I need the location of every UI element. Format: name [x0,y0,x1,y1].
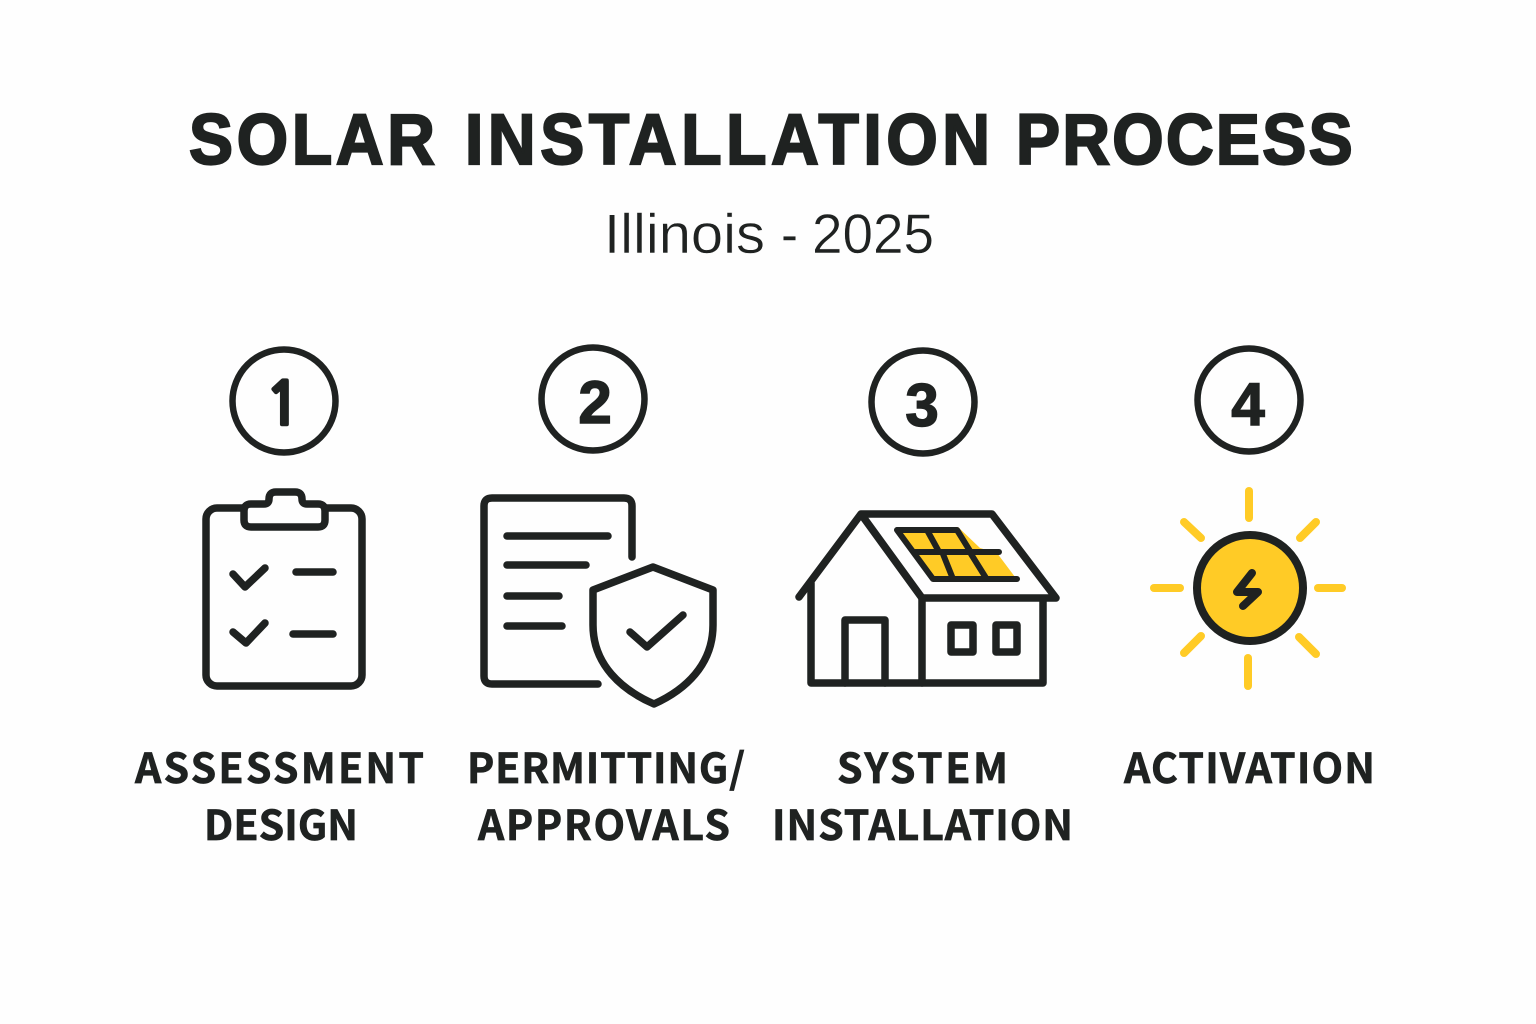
subtitle [604,202,934,265]
step 1 number badge: 1 [265,375,301,434]
title [189,100,1353,180]
label: system installation: SYSTEM [837,735,1008,795]
label: assessment design [134,735,424,852]
icon: permit document with shield [484,498,713,704]
step 4 number badge: 4 [1231,371,1265,438]
title: SOLAR [189,100,435,180]
step 1 number badge [232,350,336,452]
label: activation: ACTIVATION [1123,735,1375,795]
step 4 number badge [1198,348,1300,452]
label: permitting approvals [467,735,745,852]
title: INSTALLATION [465,100,990,180]
icon: clipboard checklist [206,492,362,686]
step 3 number badge [872,350,974,454]
label: system installation: INSTALLATION [772,792,1073,852]
title: PROCESS [1016,100,1353,180]
label: system installation [772,735,1073,852]
icon: sun with lightning bolt [1154,491,1342,686]
label: assessment design: ASSESSMENT [134,735,424,795]
subtitle: 2025 [812,202,934,265]
subtitle: - [781,202,798,265]
label: permitting approvals: PERMITTING/ [467,735,745,795]
step 3 number badge: 3 [905,372,939,439]
label: permitting approvals: APPROVALS [477,792,730,852]
icon: house with solar panels [799,514,1056,683]
subtitle: Illinois [604,202,765,265]
step 2 number badge: 2 [578,369,612,436]
label: assessment design: DESIGN [204,792,358,852]
step 2 number badge [542,348,644,450]
